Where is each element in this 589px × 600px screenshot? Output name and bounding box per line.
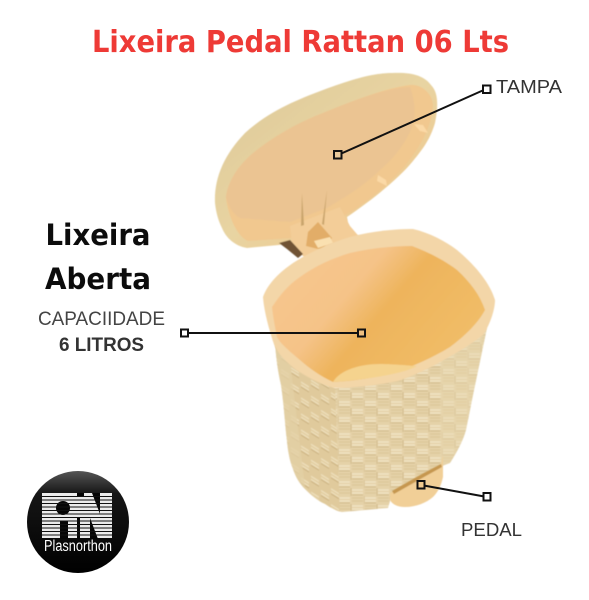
callout: pedal: PEDAL: [461, 520, 522, 540]
lid inner lip: [226, 85, 433, 241]
logo: plasnorthon: Plasnorthon: [44, 538, 112, 555]
lid clips: [377, 124, 428, 186]
open lid: [215, 73, 437, 258]
lid inner face: [226, 87, 414, 222]
left edge shading: [276, 358, 318, 500]
callout: tampa: TAMPA: [496, 77, 562, 97]
cavity floor: [333, 364, 417, 382]
cavity: [272, 246, 485, 382]
capacity text: CAPACIIDADE: [38, 309, 165, 330]
capacity text: [38, 309, 165, 356]
left woven facet: [274, 346, 340, 512]
callout: pedal: [418, 481, 522, 540]
heading: lixeira aberta: Lixeira: [46, 218, 150, 252]
capacity text: 6 LITROS: [59, 335, 144, 356]
front woven facet: [335, 325, 490, 515]
callout: tampa: [334, 77, 562, 158]
logo: plasnorthon: [27, 471, 129, 573]
callout: capacidade: [181, 330, 365, 336]
lid outer rim: [215, 73, 437, 248]
hinge assembly: [279, 190, 362, 258]
heading: lixeira aberta: [45, 218, 151, 296]
heading: lixeira aberta: Aberta: [45, 262, 151, 296]
pedal: [390, 455, 443, 507]
bin body with rattan weave: [270, 325, 490, 515]
bin rim and cavity: [263, 229, 495, 388]
logo mark: [42, 493, 112, 539]
rim: [263, 229, 495, 388]
right shading: [443, 335, 484, 456]
title: Lixeira Pedal Rattan 06 Lts: [92, 25, 509, 60]
